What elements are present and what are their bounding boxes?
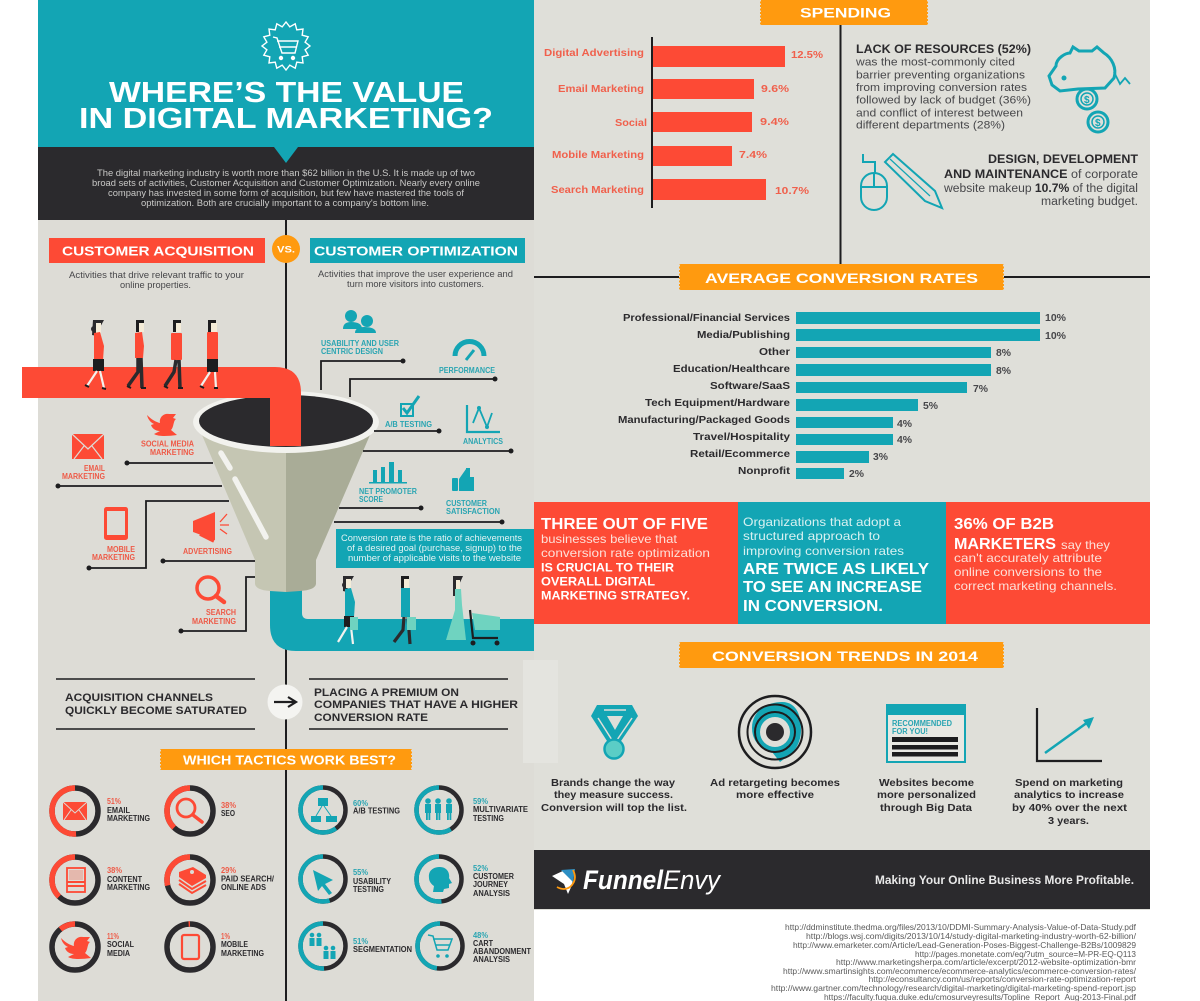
heading: customer optimization — [310, 238, 525, 263]
bar chart: average conversion rates: Education/Healthcare — [673, 363, 790, 375]
icon: mouse and pencil — [861, 154, 942, 210]
bar chart: average conversion rates: 10% — [1045, 313, 1066, 324]
donut: usability testing 55%: TESTING — [353, 885, 384, 894]
callout: three out of five: IS CRUCIAL TO THEIR — [541, 560, 674, 574]
bar chart: average conversion rates: 4% — [897, 419, 912, 430]
icon and label: customer satisfaction: SATISFACTION — [446, 507, 500, 516]
callout: three out of five — [534, 502, 738, 624]
callout: three out of five: conversion rate optimization — [541, 546, 710, 560]
sources list: http://www.marketingsherpa.com/article/excerpt/2012-website-optimization-bmr — [836, 957, 1136, 967]
trend: analytics spending: 3 years. — [1048, 815, 1089, 827]
donut: cart abandonment analysis 48%: ANALYSIS — [473, 955, 511, 964]
donut: paid search 29%: PAID SEARCH/ — [221, 874, 275, 884]
banner: average conversion rates — [679, 264, 1004, 290]
text: lack of resources: and conflict of interest between — [856, 108, 1023, 120]
donut: social media 11%: SOCIAL — [107, 940, 134, 949]
text: acquisition description — [69, 270, 244, 291]
icon and label: a/b testing: A/B TESTING — [385, 420, 432, 429]
donut: content marketing 38% — [52, 857, 150, 903]
bar chart: average conversion rates: Manufacturing/Packaged Goods — [618, 414, 790, 426]
callout: twice as likely: ARE TWICE AS LIKELY — [743, 561, 930, 578]
text: design development and maintenance: AND MAINTENANCE of corporate — [944, 169, 1138, 181]
callout: twice as likely: structured approach to — [743, 529, 880, 543]
leader line: email — [56, 484, 222, 488]
donut: content marketing 38%: 38% — [107, 866, 122, 875]
callout: three out of five: MARKETING STRATEGY. — [541, 588, 690, 602]
title — [79, 77, 493, 135]
icon and label: mobile marketing: MARKETING — [92, 553, 135, 562]
donut: social media 11%: MEDIA — [107, 949, 130, 958]
leader line: customer satisfaction — [334, 520, 504, 524]
sources list: http://econsultancy.com/us/reports/conversion-rate-optimization-report — [868, 974, 1137, 984]
banner: spending: SPENDING — [800, 4, 891, 20]
trend: brands change measurement: they measure success. — [554, 789, 673, 801]
bar chart: average conversion rates: Professional/Financial Services — [623, 312, 790, 324]
donut: social media 11% — [52, 924, 134, 970]
banner: conversion trends in 2014 — [679, 642, 1004, 668]
donut: cart abandonment analysis 48% — [418, 924, 531, 968]
icon: shopping cart badge — [262, 22, 310, 70]
trend: brands change measurement — [541, 705, 687, 814]
leader line: a/b testing — [374, 428, 442, 434]
icon and label: search marketing: MARKETING — [192, 617, 236, 626]
logo: funnelenvy: Funnel — [583, 865, 663, 895]
icon and label: advertising — [183, 512, 232, 556]
leader line: performance — [350, 376, 498, 397]
text: lack of resources — [855, 44, 1031, 132]
donut: mobile marketing 1% — [167, 924, 264, 970]
comparison: acquisition channels saturated: QUICKLY BECOME SATURATED — [65, 705, 247, 717]
text: acquisition description: Activities that drive relevant traffic to your — [69, 270, 244, 281]
bar chart: average conversion rates: 8% — [996, 348, 1011, 359]
donut: customer journey analysis 52% — [416, 856, 514, 902]
donut: customer journey analysis 52%: JOURNEY — [473, 880, 509, 889]
bar chart: average conversion rates: 4% — [897, 435, 912, 446]
bar chart: average conversion rates: 7% — [973, 384, 988, 395]
callout: conversion rate definition — [336, 529, 534, 568]
intro panel: company has invested in some form of acquisition, but few have mastered the tools of — [108, 188, 464, 199]
trend: brands change measurement: Conversion will top the list. — [541, 802, 687, 814]
bar chart: spending — [544, 37, 824, 208]
icon and label: customer satisfaction: CUSTOMER — [446, 499, 487, 508]
bar chart: spending: Search Marketing — [551, 184, 644, 196]
text: design development and maintenance — [943, 154, 1138, 208]
sources list: http://www.gartner.com/technology/research/digital-marketing/digital-marketing-spend-report.jsp — [771, 983, 1136, 993]
sources list: http://pages.monetate.com/eq/?utm_source=M-PR-EQ-Q113 — [915, 949, 1136, 959]
text: lack of resources: LACK OF RESOURCES (52%) — [856, 44, 1031, 56]
tagline: Making Your Online Business More Profitable. — [875, 875, 1134, 887]
title: IN DIGITAL MARKETING? — [79, 103, 493, 135]
icon and label: mobile marketing — [92, 507, 136, 562]
callout: three out of five: businesses believe that — [541, 532, 678, 546]
leader line: social media — [124, 460, 213, 466]
trend: brands change measurement: Brands change the way — [551, 777, 675, 789]
donut: mobile marketing 1%: MARKETING — [221, 949, 264, 958]
donut: seo 38%: 38% — [221, 801, 236, 810]
comparison: premium on higher conversion: CONVERSION RATE — [314, 712, 428, 724]
donut: customer journey analysis 52%: 52% — [473, 864, 488, 873]
icon: piggy bank with coins: $ — [1084, 95, 1090, 106]
icon and label: performance — [439, 342, 496, 375]
teal exit pipe — [270, 585, 534, 651]
donut: a/b testing 60%: A/B TESTING — [353, 806, 400, 816]
donut: multivariate testing 59%: TESTING — [473, 814, 504, 823]
text: optimization description — [318, 269, 513, 290]
bar chart: average conversion rates: Software/SaaS — [710, 380, 790, 392]
title: WHERE’S THE VALUE — [109, 77, 464, 109]
donut: paid search 29% — [167, 857, 275, 903]
bar chart: spending: 7.4% — [739, 149, 768, 161]
trend: personalized websites: through Big Data — [880, 802, 972, 814]
icon and label: usability and user centric design: CENTRIC DESIGN — [321, 347, 383, 356]
callout: twice as likely: IN CONVERSION. — [743, 598, 883, 615]
leader line: search — [178, 577, 255, 634]
text: lack of resources: followed by lack of budget (36%) — [856, 94, 1031, 106]
trend: personalized websites: RECOMMENDED — [892, 719, 952, 728]
text: design development and maintenance: marketing budget. — [1041, 196, 1138, 208]
callout: three out of five: THREE OUT OF FIVE — [541, 516, 708, 533]
leader line: net promoter — [339, 506, 424, 510]
callout: 36% of b2b marketers: online conversions to the — [954, 565, 1102, 579]
banner: average conversion rates: AVERAGE CONVERSION RATES — [705, 270, 978, 286]
banner: conversion trends in 2014: CONVERSION TRENDS IN 2014 — [712, 648, 978, 664]
bar chart: spending: Digital Advertising — [544, 47, 644, 59]
bar chart: average conversion rates — [618, 312, 1066, 480]
logo: funnelenvy — [552, 865, 721, 895]
donut: cart abandonment analysis 48%: ABANDONMENT — [473, 947, 531, 956]
text: optimization description: Activities that improve the user experience and — [318, 269, 513, 280]
callout: 36% of b2b marketers — [946, 502, 1150, 624]
icon and label: email marketing: MARKETING — [62, 472, 105, 481]
callout: 36% of b2b marketers: MARKETERS — [954, 536, 1056, 553]
icon and label: analytics: ANALYTICS — [463, 437, 504, 446]
arrow circle — [268, 684, 302, 720]
icon and label: mobile marketing: MOBILE — [107, 545, 136, 554]
donut: usability testing 55%: 55% — [353, 868, 368, 877]
bar chart: average conversion rates: 3% — [873, 452, 888, 463]
donut: mobile marketing 1%: 1% — [221, 932, 230, 941]
donut: multivariate testing 59%: MULTIVARIATE — [473, 805, 529, 814]
trend: ad retargeting: more effective — [736, 789, 814, 801]
heading: customer acquisition — [49, 238, 265, 263]
bar chart: spending: 9.6% — [761, 83, 790, 95]
bar chart: spending: 10.7% — [775, 185, 810, 197]
intro panel: broad sets of activities, Customer Acquisition and Customer Optimization. Nearly every online — [92, 178, 480, 189]
donut: email marketing 51%: EMAIL — [107, 806, 130, 815]
donut: content marketing 38%: MARKETING — [107, 883, 150, 892]
bar chart: spending: 12.5% — [791, 49, 824, 61]
donut: multivariate testing 59%: 59% — [473, 797, 488, 806]
icon and label: social media marketing: MARKETING — [150, 448, 194, 457]
icon and label: search marketing — [192, 577, 236, 626]
text: acquisition description: online properties. — [120, 280, 191, 291]
donut: email marketing 51% — [52, 788, 150, 834]
donut: paid search 29%: 29% — [221, 866, 236, 875]
icon and label: usability and user centric design — [321, 310, 399, 356]
donut: a/b testing 60% — [300, 788, 400, 832]
leader line: analytics — [363, 448, 514, 454]
bar chart: spending: Email Marketing — [558, 83, 644, 95]
heading: customer optimization: CUSTOMER OPTIMIZATION — [314, 244, 518, 258]
icon and label: net promoter score — [359, 462, 417, 504]
callout: three out of five: OVERALL DIGITAL — [541, 574, 655, 588]
leader line: mobile — [86, 501, 229, 570]
icon: piggy bank with coins — [1049, 47, 1130, 132]
sources list: http://www.smartinsights.com/ecommerce/ecommerce-analytics/ecommerce-conversion-rates/ — [783, 966, 1137, 976]
vs badge: VS. — [277, 244, 295, 254]
trend: personalized websites: Websites become — [879, 777, 974, 789]
icon and label: social media marketing: SOCIAL MEDIA — [141, 440, 194, 448]
title header panel — [38, 0, 534, 147]
bar chart: average conversion rates: 8% — [996, 366, 1011, 377]
bar chart: average conversion rates: Nonprofit — [738, 465, 791, 477]
intro panel — [38, 147, 534, 220]
callout: conversion rate definition: number of applicable visits to the website — [348, 553, 521, 564]
donut: segmentation 51% — [300, 924, 412, 968]
text: lack of resources: from improving conversion rates — [856, 82, 1028, 94]
donut: customer journey analysis 52%: ANALYSIS — [473, 889, 511, 898]
icon and label: net promoter score: SCORE — [359, 495, 384, 504]
trend: personalized websites — [877, 704, 976, 814]
icon and label: net promoter score: NET PROMOTER — [359, 487, 417, 496]
donut: email marketing 51%: 51% — [107, 797, 121, 806]
banner: which tactics work best: WHICH TACTICS WORK BEST? — [183, 754, 396, 768]
callout: twice as likely — [738, 502, 946, 624]
people exiting: teal with bags and cart — [338, 576, 500, 646]
comparison: premium on higher conversion — [309, 679, 518, 729]
donut: usability testing 55%: USABILITY — [353, 877, 392, 886]
callout: 36% of b2b marketers: correct marketing channels. — [954, 579, 1117, 593]
bar chart: average conversion rates: Media/Publishing — [697, 329, 790, 341]
bar chart: average conversion rates: Retail/Ecommerce — [690, 448, 790, 460]
comparison: premium on higher conversion: PLACING A PREMIUM ON — [314, 687, 459, 699]
donut: usability testing 55% — [300, 856, 392, 902]
callout: conversion rate definition: Conversion rate is the ratio of achievements — [341, 533, 522, 544]
donut: paid search 29%: ONLINE ADS — [221, 883, 267, 892]
trend: personalized websites: more personalized — [877, 789, 976, 801]
people entering: red — [85, 320, 218, 389]
text: lack of resources: different departments (28%) — [856, 120, 1005, 132]
bar chart: spending: Social — [615, 117, 647, 129]
funnel diagram — [193, 391, 379, 592]
bar chart: average conversion rates: Other — [759, 346, 790, 358]
donut: mobile marketing 1%: MOBILE — [221, 940, 249, 949]
icon and label: a/b testing — [385, 396, 432, 429]
comparison: acquisition channels saturated: ACQUISITION CHANNELS — [65, 692, 213, 704]
donut: customer journey analysis 52%: CUSTOMER — [473, 872, 514, 881]
callout: twice as likely: Organizations that adopt a — [743, 515, 901, 529]
callout: 36% of b2b marketers: 36% OF B2B — [954, 516, 1054, 533]
sources list: http://ddminstitute.thedma.org/files/2013/10/DDMI-Summary-Analysis-Value-of-Data-Study.pdf — [785, 922, 1137, 932]
donut: content marketing 38%: CONTENT — [107, 875, 142, 884]
trend: ad retargeting — [710, 696, 840, 801]
bar chart: average conversion rates: 5% — [923, 401, 938, 412]
icon and label: email marketing — [62, 434, 105, 481]
banner: which tactics work best — [160, 749, 412, 770]
bar chart: spending: 9.4% — [760, 116, 790, 128]
callout: conversion rate definition: of a desired goal (purchase, signup) to the — [347, 543, 522, 554]
donut: cart abandonment analysis 48%: CART — [473, 939, 493, 948]
icon and label: social media marketing — [141, 414, 194, 457]
text: lack of resources: barrier preventing organizations — [856, 70, 1026, 82]
icon and label: email marketing: EMAIL — [84, 464, 105, 473]
donut: a/b testing 60%: 60% — [353, 799, 368, 808]
icon and label: analytics — [463, 405, 504, 446]
sources list: http://blogs.wsj.com/digits/2013/10/14/study-digital-marketing-industry-worth-62-billion/ — [806, 931, 1137, 941]
trend: personalized websites: FOR YOU! — [892, 727, 928, 736]
callout: twice as likely: TO SEE AN INCREASE — [743, 579, 922, 596]
bar chart: average conversion rates: Travel/Hospitality — [693, 431, 790, 443]
text: design development and maintenance: DESIGN, DEVELOPMENT — [988, 154, 1138, 166]
trend: analytics spending: analytics to increase — [1014, 789, 1124, 801]
sources list: http://www.emarketer.com/Article/Lead-Generation-Poses-Biggest-Challenge-B2Bs/1009829 — [793, 940, 1136, 950]
intro panel: optimization. Both are crucially important to a company's bottom line. — [141, 198, 429, 209]
donut: seo 38% — [167, 788, 236, 834]
donut: segmentation 51%: 51% — [353, 937, 368, 946]
donut: seo 38%: SEO — [221, 809, 235, 818]
donut: email marketing 51%: MARKETING — [107, 814, 150, 823]
text: design development and maintenance: website makeup 10.7% of the digital — [943, 183, 1138, 195]
bar chart: average conversion rates: 10% — [1045, 331, 1066, 342]
icon and label: customer satisfaction — [446, 468, 500, 516]
banner: spending — [760, 0, 928, 25]
donut: segmentation 51%: SEGMENTATION — [353, 945, 412, 954]
trend: analytics spending: by 40% over the next — [1012, 802, 1128, 814]
leader line: advertising — [160, 558, 255, 564]
vs badge — [272, 235, 300, 263]
trend: analytics spending: Spend on marketing — [1015, 777, 1123, 789]
logo: funnelenvy: Envy — [663, 865, 721, 895]
callout: 36% of b2b marketers: can't accurately attribute — [954, 551, 1102, 565]
trend: analytics spending — [1012, 708, 1128, 827]
icon and label: usability and user centric design: USABILITY AND USER — [321, 339, 399, 348]
donut: multivariate testing 59% — [416, 788, 529, 832]
bar chart: average conversion rates: Tech Equipment/Hardware — [645, 397, 790, 409]
leader line: usability — [321, 358, 406, 390]
text: optimization description: turn more visitors into customers. — [347, 279, 484, 290]
intro panel: The digital marketing industry is worth more than $62 billion in the U.S. It is made up of two — [97, 168, 475, 179]
callout: 36% of b2b marketers: say they — [1061, 538, 1110, 552]
bar chart: spending: Mobile Marketing — [552, 149, 644, 161]
text: lack of resources: was the most-commonly cited — [855, 56, 1015, 68]
icon and label: search marketing: SEARCH — [206, 608, 236, 617]
donut: social media 11%: 11% — [107, 932, 119, 941]
sources list — [771, 922, 1137, 1001]
red entry pipe — [22, 367, 301, 446]
comparison: acquisition channels saturated — [56, 679, 255, 729]
icon and label: advertising: ADVERTISING — [183, 547, 232, 556]
comparison: premium on higher conversion: COMPANIES THAT HAVE A HIGHER — [314, 699, 518, 711]
icon: piggy bank with coins: $ — [1095, 118, 1101, 129]
icon and label: performance: PERFORMANCE — [439, 366, 496, 375]
heading: customer acquisition: CUSTOMER ACQUISITION — [62, 244, 254, 258]
callout: twice as likely: improving conversion rates — [743, 544, 904, 558]
footer bar — [534, 850, 1150, 909]
trend: ad retargeting: Ad retargeting becomes — [710, 777, 840, 789]
bar chart: average conversion rates: 2% — [849, 469, 864, 480]
donut: cart abandonment analysis 48%: 48% — [473, 931, 488, 940]
